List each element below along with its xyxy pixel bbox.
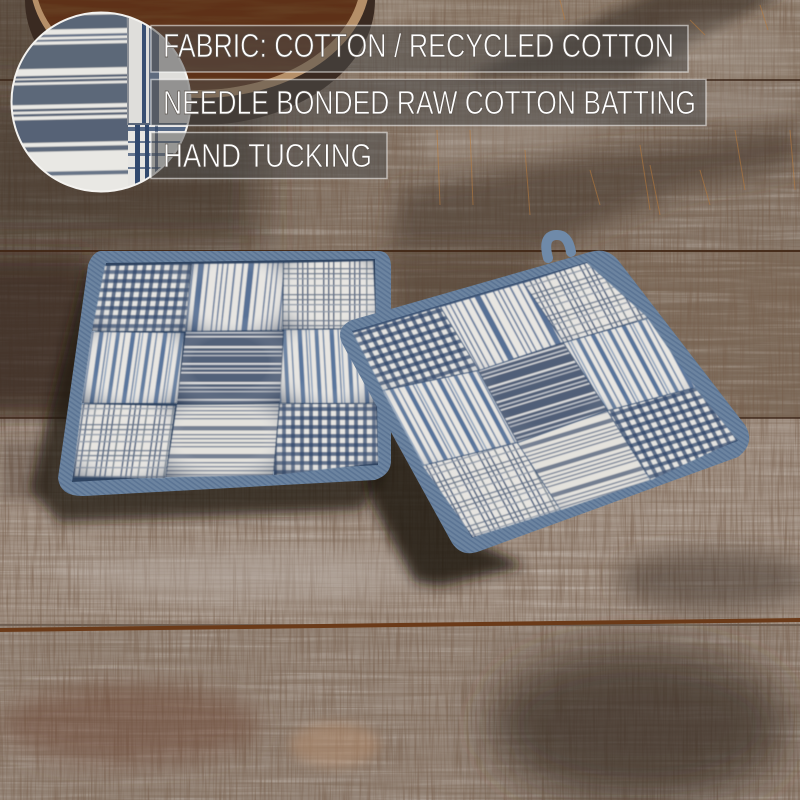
right pot holder (340, 235, 749, 553)
fabric patches: left holder (73, 261, 378, 478)
patch: gingham top left (92, 264, 191, 331)
stripes: left fabric (12, 14, 128, 176)
patch: plaid top right (283, 261, 376, 329)
stripes: right fabric (129, 18, 186, 123)
shadow: left pot holder (30, 262, 385, 522)
patch: plaid bottom left (423, 443, 560, 537)
binding: right holder (340, 251, 749, 553)
label: fabric: FABRIC: COTTON / RECYCLED COTTON (163, 27, 674, 64)
hanging loop (546, 235, 571, 258)
patch shading: left holder (73, 261, 378, 478)
patch: gingham bottom right (608, 388, 737, 480)
patch: stripes middle right (280, 329, 376, 403)
patch: dark stripes center (479, 343, 607, 442)
binding: left holder (58, 251, 391, 496)
wooden bowl (25, 0, 375, 125)
fabric patches: right holder (353, 263, 737, 537)
patch shading: right holder (353, 263, 737, 537)
shadow: right pot holder (345, 345, 525, 586)
patch: stripes bottom middle (166, 404, 279, 477)
patch: stripes top middle (441, 283, 563, 370)
label: batting (151, 80, 706, 126)
patch: stripes bottom middle (518, 411, 650, 510)
left pot holder (58, 251, 391, 496)
magnified fabric detail circle (10, 12, 192, 192)
label: hand tucking: HAND TUCKING (163, 137, 372, 174)
patch: gingham top (353, 307, 478, 390)
patch: plaid top right (524, 263, 648, 342)
patch: plaid bottom left (73, 404, 175, 478)
patch: gingham bottom right (274, 404, 378, 475)
label: fabric (151, 26, 688, 72)
patch: stripes top middle (185, 263, 283, 331)
patch: stripes middle left (82, 332, 184, 403)
patch: stripes middle left (383, 371, 517, 465)
plaid: corner fabric (128, 125, 186, 184)
patch: stripes middle right (564, 319, 695, 410)
patch: dark stripes center (177, 331, 283, 404)
